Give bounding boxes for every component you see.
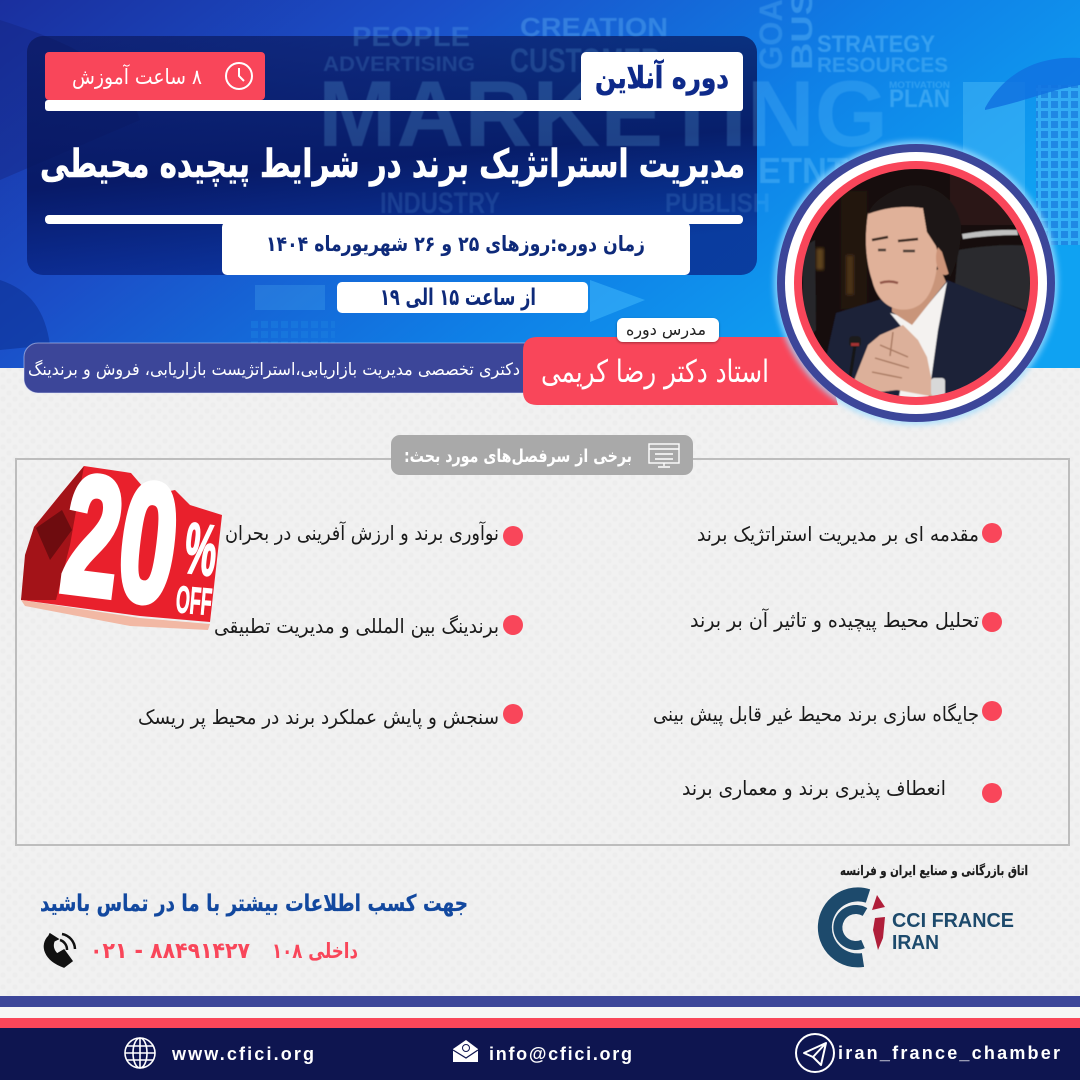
footer bar bbox=[0, 1028, 1080, 1080]
instructor portrait bbox=[774, 141, 1058, 425]
chamber name: اتاق بازرگانی و صنایع ایران و فرانسه bbox=[840, 863, 1028, 879]
dark title panel bbox=[27, 36, 757, 275]
topic 2: تحلیل محیط پیچیده و تاثیر آن بر برند bbox=[690, 607, 979, 633]
marketing words: BUS bbox=[786, 0, 819, 70]
percent: % bbox=[180, 508, 222, 592]
halftone dot texture bbox=[0, 368, 1080, 996]
topics heading chip: برخی از سرفصل‌های مورد بحث: bbox=[404, 446, 632, 467]
marketing words: ETNT bbox=[758, 150, 848, 191]
marketing words: MARKETING bbox=[318, 61, 888, 166]
instructor name plate bbox=[523, 337, 838, 405]
contact heading: جهت کسب اطلاعات بیشتر با ما در تماس باشید bbox=[40, 891, 468, 917]
course topics frame bbox=[16, 459, 1069, 845]
icon: clock bbox=[226, 63, 252, 89]
marketing words: RESOURCES bbox=[817, 54, 948, 77]
icon: telegram bbox=[796, 1034, 834, 1072]
training hours pill bbox=[45, 52, 265, 100]
topics right column bbox=[653, 522, 1002, 803]
course instructor label bbox=[617, 318, 719, 342]
website: www.cfici.org bbox=[171, 1044, 314, 1064]
online course badge bbox=[581, 52, 743, 108]
tricolor stripes bbox=[0, 996, 1080, 1028]
course hours box bbox=[337, 282, 588, 313]
marketing words: STRATEGY bbox=[817, 31, 935, 58]
white rule above date bbox=[45, 215, 743, 224]
telegram handle: iran_france_chamber bbox=[838, 1043, 1060, 1063]
topics left column bbox=[138, 520, 523, 730]
topic 6: برندینگ بین المللی و مدیریت تطبیقی bbox=[214, 614, 499, 638]
course hours box: از ساعت ۱۵ الی ۱۹ bbox=[380, 285, 536, 311]
extension: داخلی ۱۰۸ bbox=[272, 939, 358, 963]
course instructor label: مدرس دوره bbox=[626, 320, 706, 340]
hours text: ۸ ساعت آموزش bbox=[72, 64, 202, 89]
logo: CCI France Iran: CCI FRANCE bbox=[892, 910, 1014, 932]
logo: CCI France Iran: IRAN bbox=[892, 932, 939, 954]
photo bbox=[800, 165, 1032, 402]
marketing words: PLAN bbox=[889, 85, 950, 113]
off: OFF bbox=[174, 579, 213, 624]
instructor bio pill bbox=[24, 343, 554, 393]
big number: 20 bbox=[54, 441, 188, 640]
marketing words: MOTIVATION bbox=[889, 80, 950, 90]
icon: envelope bbox=[453, 1040, 478, 1062]
title: مدیریت استراتژیک برند در شرایط پیچیده محیطی bbox=[40, 142, 745, 187]
topic 4: انعطاف پذیری برند و معماری برند bbox=[682, 776, 946, 801]
marketing words: INDUSTRY bbox=[380, 187, 500, 220]
icon: monitor bbox=[649, 444, 679, 467]
marketing words bbox=[318, 0, 950, 220]
marketing words: PUBLISH bbox=[665, 188, 770, 218]
white rule under badges bbox=[45, 100, 743, 111]
topic 3: جایگاه سازی برند محیط غیر قابل پیش بینی bbox=[653, 702, 979, 727]
marketing words: ADVERTISING bbox=[323, 53, 475, 76]
course date box bbox=[222, 222, 690, 275]
icon: phone bbox=[44, 934, 75, 967]
instructor bio pill: دکتری تخصصی مدیریت بازاریابی،استراتژیست بازاریابی، فروش و برندینگ bbox=[28, 359, 520, 380]
logo: CCI France Iran bbox=[825, 894, 1014, 960]
tablet and hand shapes bbox=[0, 20, 1080, 350]
topic 1: مقدمه ای بر مدیریت استراتژیک برند bbox=[697, 522, 979, 546]
email: info@cfici.org bbox=[489, 1044, 632, 1064]
instructor name plate: استاد دکتر رضا کریمی bbox=[541, 354, 769, 390]
20% off sticker bbox=[21, 441, 222, 640]
topic 5: نوآوری برند و ارزش آفرینی در بحران bbox=[225, 520, 499, 545]
topic 7: سنجش و پایش عملکرد برند در محیط پر ریسک bbox=[138, 705, 499, 730]
phone number: ۰۲۱ - ۸۸۴۹۱۴۲۷ bbox=[90, 939, 251, 964]
marketing words: PEOPLE bbox=[352, 21, 470, 52]
online course badge: دوره آنلاین bbox=[595, 59, 729, 96]
contact phone bbox=[44, 934, 358, 967]
marketing words: CUSTOMER bbox=[510, 42, 660, 80]
topics heading chip bbox=[391, 435, 693, 475]
marketing words: CREATION bbox=[520, 12, 668, 42]
icon: globe bbox=[125, 1038, 155, 1068]
header background with marketing word cloud bbox=[0, 0, 1080, 368]
course date box: زمان دوره:روزهای ۲۵ و ۲۶ شهریورماه ۱۴۰۴ bbox=[266, 232, 645, 256]
